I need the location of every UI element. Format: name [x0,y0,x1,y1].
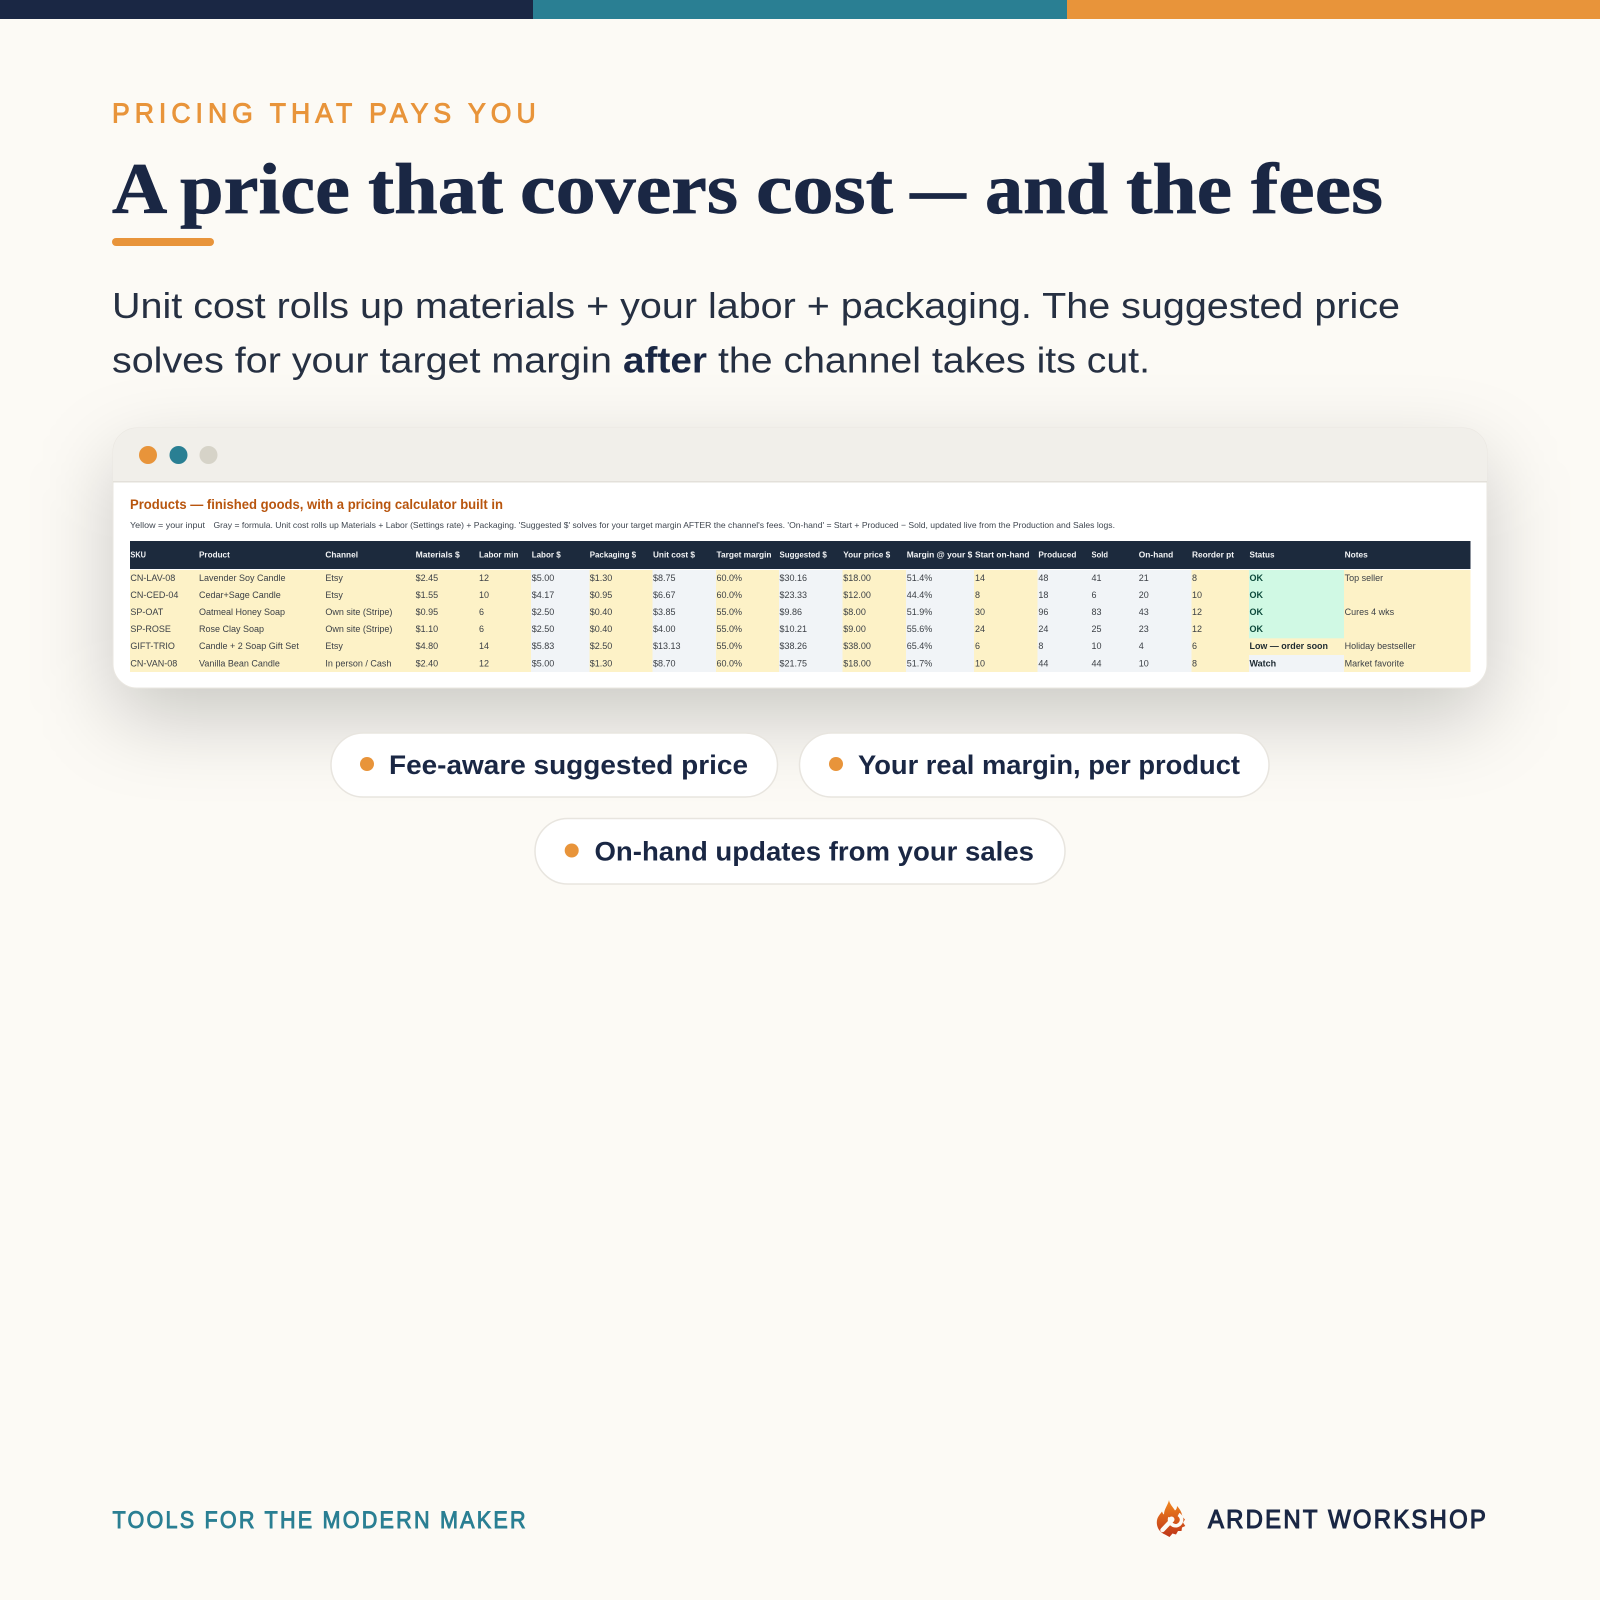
title underline accent [112,238,214,246]
row: SP-OAT: $0.40 [590,607,612,617]
footer tagline: TOOLS FOR THE MODERN MAKER [112,1506,526,1533]
table header row: Reorder pt [1192,550,1234,560]
row: CN-CED-04: 6 [1092,590,1097,600]
row: SP-OAT: OK [1250,607,1264,617]
row: GIFT-TRIO: Low — order soon [1250,641,1328,651]
row: SP-ROSE: 25 [1092,624,1102,634]
pill: your real margin: Your real margin, per product [858,750,1240,780]
row: SP-OAT: Cures 4 wks [1345,607,1395,617]
table header row [130,541,1470,569]
title: covers [520,149,738,229]
row: CN-LAV-08: $1.30 [590,573,612,583]
row: CN-LAV-08: Lavender Soy Candle [199,573,286,583]
row: CN-VAN-08: Vanilla Bean Candle [199,658,280,668]
row: GIFT-TRIO: $5.83 [532,641,554,651]
window dots [139,446,218,464]
row: CN-CED-04: 18 [1038,590,1048,600]
table header row: Target margin [716,550,772,560]
eyebrow: PRICING THAT PAYS YOU [112,97,536,129]
brand name: ARDENT WORKSHOP [1208,1505,1486,1534]
row: SP-ROSE [130,624,1264,634]
row: SP-OAT: 12 [1192,607,1202,617]
row: SP-ROSE: $2.50 [532,624,554,634]
row: CN-CED-04: 10 [479,590,489,600]
row: SP-OAT [130,607,1395,617]
row: SP-OAT: $9.86 [780,607,802,617]
row: SP-OAT: $0.95 [416,607,438,617]
row: SP-OAT: $2.50 [532,607,554,617]
row: CN-LAV-08: CN-LAV-08 [130,573,175,583]
row: SP-OAT: $8.00 [843,607,866,617]
row: CN-LAV-08: OK [1250,573,1264,583]
row: CN-CED-04: 44.4% [907,590,932,600]
row: CN-LAV-08: Top seller [1345,573,1383,583]
row: SP-ROSE: $1.10 [416,624,438,634]
row: SP-ROSE: $4.00 [653,624,676,634]
row: SP-ROSE: 23 [1139,624,1149,634]
row: GIFT-TRIO: $38.00 [843,641,871,651]
row: CN-CED-04: $0.95 [590,590,612,600]
table header row: Margin @ your $ [907,550,973,560]
row: GIFT-TRIO: Holiday bestseller [1345,641,1416,651]
subtitle: after [623,340,707,380]
pill: on-hand updates [535,818,1065,884]
table header row: Product [199,550,230,560]
title: fees [1251,149,1383,229]
row: CN-VAN-08: 10 [975,658,985,668]
row: CN-VAN-08 [130,658,1404,668]
row: CN-VAN-08: 44 [1038,658,1048,668]
row: SP-OAT: 96 [1038,607,1048,617]
row: CN-CED-04: Cedar+Sage Candle [199,590,281,600]
row: CN-VAN-08: Market favorite [1345,658,1404,668]
title: cost [756,149,893,229]
row: CN-VAN-08: 51.7% [907,658,932,668]
row: CN-VAN-08: In person / Cash [325,658,391,668]
row: CN-LAV-08: 60.0% [716,573,742,583]
title: price [180,149,350,229]
row: SP-ROSE: 24 [975,624,985,634]
row: CN-VAN-08: Watch [1250,658,1276,668]
row: CN-VAN-08: $18.00 [843,658,871,668]
row: CN-LAV-08: Etsy [325,573,343,583]
row: SP-ROSE: $10.21 [780,624,807,634]
row: SP-OAT: $3.85 [653,607,676,617]
row: CN-VAN-08: 8 [1192,658,1197,668]
table header row: Channel [325,550,358,560]
row: CN-LAV-08 [130,573,1383,583]
row: SP-ROSE: 24 [1038,624,1048,634]
row: GIFT-TRIO: 6 [975,641,980,651]
row: GIFT-TRIO: 14 [479,641,489,651]
subtitle: solves for your target margin [112,340,612,380]
subtitle [112,285,1400,380]
row: GIFT-TRIO: $38.26 [780,641,807,651]
row: SP-OAT: 51.9% [907,607,932,617]
table header row: Labor min [479,550,518,560]
row: CN-CED-04: $1.55 [416,590,438,600]
row: SP-ROSE: 12 [1192,624,1202,634]
title: and [985,149,1108,229]
title: A [112,149,167,229]
table header row: Your price $ [843,550,890,560]
row: SP-ROSE: 55.0% [716,624,742,634]
cell fills [130,570,1470,672]
row: CN-VAN-08: $1.30 [590,658,612,668]
row: SP-OAT: Oatmeal Honey Soap [199,607,285,617]
icon: flame with wrench and gear [1157,1500,1185,1537]
pill: your real margin [800,733,1269,797]
row: GIFT-TRIO: Candle + 2 Soap Gift Set [199,641,299,651]
row: SP-ROSE: Own site (Stripe) [325,624,392,634]
row: SP-OAT: Own site (Stripe) [325,607,392,617]
row: CN-CED-04 [130,590,1264,600]
row: GIFT-TRIO [130,641,1416,651]
table header row: Produced [1038,550,1076,560]
table header row: Materials $ [416,550,460,560]
row: SP-OAT: 55.0% [716,607,742,617]
row: CN-CED-04: $4.17 [532,590,554,600]
row: GIFT-TRIO: $13.13 [653,641,681,651]
row: CN-CED-04: 60.0% [716,590,742,600]
subtitle: the channel takes its cut. [718,340,1150,380]
row: CN-LAV-08: 41 [1092,573,1102,583]
row: SP-OAT: 43 [1139,607,1149,617]
row: SP-ROSE: $9.00 [843,624,866,634]
row: GIFT-TRIO: Etsy [325,641,343,651]
table header row: On-hand [1139,550,1173,560]
row: CN-VAN-08: $2.40 [416,658,438,668]
row: CN-CED-04: Etsy [325,590,343,600]
row: CN-VAN-08: $21.75 [780,658,807,668]
row: SP-OAT: 30 [975,607,985,617]
row: CN-VAN-08: 44 [1092,658,1102,668]
row: GIFT-TRIO: 6 [1192,641,1197,651]
row: CN-LAV-08: 21 [1139,573,1149,583]
row: GIFT-TRIO: GIFT-TRIO [130,641,175,651]
row: CN-LAV-08: $2.45 [416,573,438,583]
table header row: SKU [130,550,146,560]
pill: fee-aware suggested price [331,733,778,797]
pill: on-hand updates: On-hand updates from your sales [594,836,1034,866]
row: SP-ROSE: 6 [479,624,484,634]
row: CN-LAV-08: $30.16 [780,573,807,583]
table header row: Suggested $ [780,550,827,560]
title: the [1126,149,1232,229]
row: CN-CED-04: OK [1250,590,1264,600]
panel: spreadsheet window [113,428,1487,688]
row: CN-LAV-08: $8.75 [653,573,676,583]
row: CN-VAN-08: 60.0% [716,658,742,668]
table header row: Notes [1345,550,1368,560]
row: GIFT-TRIO: $4.80 [416,641,438,651]
row: SP-ROSE: $0.40 [590,624,612,634]
spreadsheet image [130,497,1470,672]
row: GIFT-TRIO: 10 [1092,641,1102,651]
row: SP-ROSE: OK [1250,624,1264,634]
row: CN-CED-04: 8 [975,590,980,600]
subtitle: Unit cost rolls up materials + your labor + packaging. The suggested price [112,285,1400,326]
pill: fee-aware suggested price: Fee-aware suggested price [389,750,748,780]
table header row: Unit cost $ [653,550,695,560]
title: that [368,149,503,229]
row: CN-LAV-08: $18.00 [843,573,871,583]
row: SP-OAT: 83 [1092,607,1102,617]
row: CN-CED-04: 20 [1139,590,1149,600]
row: CN-LAV-08: 51.4% [907,573,932,583]
row: GIFT-TRIO: 4 [1139,641,1144,651]
row: SP-ROSE: Rose Clay Soap [199,624,264,634]
row: CN-CED-04: $6.67 [653,590,676,600]
title: — [909,149,967,229]
row: GIFT-TRIO: 55.0% [716,641,742,651]
row: CN-LAV-08: 14 [975,573,985,583]
sheet title: Products — finished goods, with a pricing calculator built in [130,497,503,512]
row: CN-CED-04: 10 [1192,590,1202,600]
table header row: Sold [1092,550,1108,560]
sheet note: Yellow = your input [130,520,206,530]
window title bar [113,428,1487,482]
row: SP-ROSE: 55.6% [907,624,932,634]
row: SP-OAT: SP-OAT [130,607,164,617]
row: SP-ROSE: SP-ROSE [130,624,171,634]
card shadow [113,458,1487,718]
table header row: Packaging $ [590,550,636,560]
row: CN-CED-04: CN-CED-04 [130,590,178,600]
row: CN-LAV-08: $5.00 [532,573,554,583]
table header row: Labor $ [532,550,561,560]
row: GIFT-TRIO: 65.4% [907,641,932,651]
table header row: Status [1250,550,1275,560]
row: GIFT-TRIO: $2.50 [590,641,612,651]
row: CN-LAV-08: 8 [1192,573,1197,583]
row: CN-VAN-08: $8.70 [653,658,676,668]
table header row: Start on-hand [975,550,1030,560]
sheet note: Gray = formula. Unit cost rolls up Materials + Labor (Settings rate) + Packaging. 'Suggested $' solves for your target margin AFTER the channel's fees. 'On-hand' = Start + Produced − Sold, updated live from the Production and Sales logs. [214,520,1115,530]
row: SP-OAT: 6 [479,607,484,617]
row: CN-VAN-08: $5.00 [532,658,554,668]
row: GIFT-TRIO: 8 [1038,641,1043,651]
row: CN-CED-04: $12.00 [843,590,871,600]
row: CN-VAN-08: 10 [1139,658,1149,668]
row: CN-VAN-08: 12 [479,658,489,668]
row: CN-LAV-08: 12 [479,573,489,583]
row: CN-CED-04: $23.33 [780,590,807,600]
row: CN-VAN-08: CN-VAN-08 [130,658,177,668]
top colour bar [0,0,1600,19]
row: CN-LAV-08: 48 [1038,573,1048,583]
